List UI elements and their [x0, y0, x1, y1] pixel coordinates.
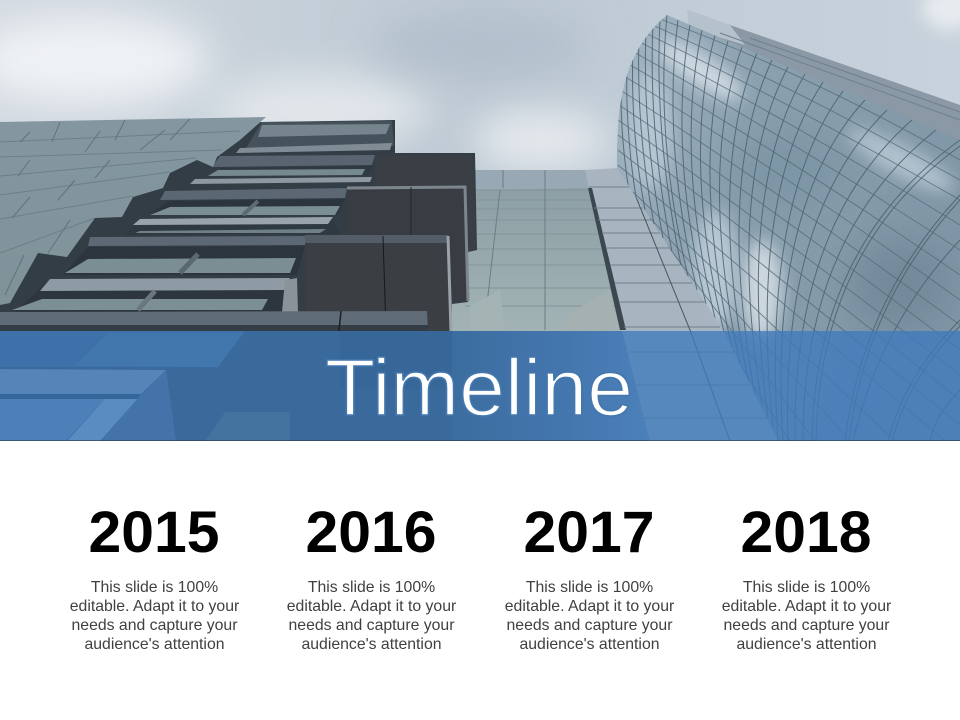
description 2017: editable. Adapt it to your: [505, 598, 674, 615]
description 2015: editable. Adapt it to your: [70, 598, 239, 615]
title: Timeline: [325, 343, 633, 432]
meridian grid lines: [621, 15, 960, 441]
timeline column: 2018: [722, 500, 891, 653]
bottom dark photo edge: [0, 440, 960, 441]
description 2017: This slide is 100%: [526, 579, 653, 596]
left building: dark structure: [0, 120, 477, 335]
blue title band overlay: [622, 331, 960, 441]
timeline column: 2017: [505, 500, 674, 653]
description 2018: editable. Adapt it to your: [722, 598, 891, 615]
lower building seen through band: [0, 331, 452, 441]
timeline column: 2016: [287, 500, 456, 653]
balcony row 2: [190, 177, 372, 184]
floor grid lines: [618, 19, 960, 441]
balcony row 5: [88, 236, 305, 246]
year 2016: 2016: [306, 500, 436, 565]
centre facade seen through band: [452, 331, 650, 441]
left building: frosted glass canopy panels: [0, 117, 266, 305]
sky with clouds: [0, 0, 960, 330]
description 2018: needs and capture your: [724, 617, 889, 634]
year 2017: 2017: [524, 500, 654, 565]
right wall cladding panels: [585, 168, 778, 441]
balcony row 1: [212, 155, 375, 167]
rear tower roof section: [687, 10, 960, 145]
description 2017: needs and capture your: [507, 617, 672, 634]
year 2015: 2015: [88, 500, 220, 565]
description 2017: audience's attention: [519, 636, 660, 653]
balcony row 6: [15, 278, 297, 312]
dark block A: [468, 250, 476, 252]
description 2015: audience's attention: [84, 636, 225, 653]
description 2016: This slide is 100%: [308, 579, 435, 596]
curved glass tower: [617, 15, 960, 441]
description 2018: audience's attention: [736, 636, 877, 653]
top balcony band: [245, 121, 394, 150]
timeline column: 2015: [70, 500, 239, 653]
balcony row 4: [125, 217, 340, 235]
dark block B: [347, 187, 468, 303]
description 2018: This slide is 100%: [743, 579, 870, 596]
balcony row 3: [160, 188, 347, 200]
description 2015: This slide is 100%: [91, 579, 218, 596]
description 2016: audience's attention: [301, 636, 442, 653]
bottom ledge: [0, 311, 428, 325]
description 2016: needs and capture your: [289, 617, 454, 634]
centre glass facade: [452, 170, 622, 331]
dark block C: [410, 243, 412, 300]
description 2016: editable. Adapt it to your: [287, 598, 456, 615]
photo: glass buildings seen from below: [0, 0, 960, 442]
description 2015: needs and capture your: [72, 617, 237, 634]
year 2018: 2018: [740, 500, 872, 565]
